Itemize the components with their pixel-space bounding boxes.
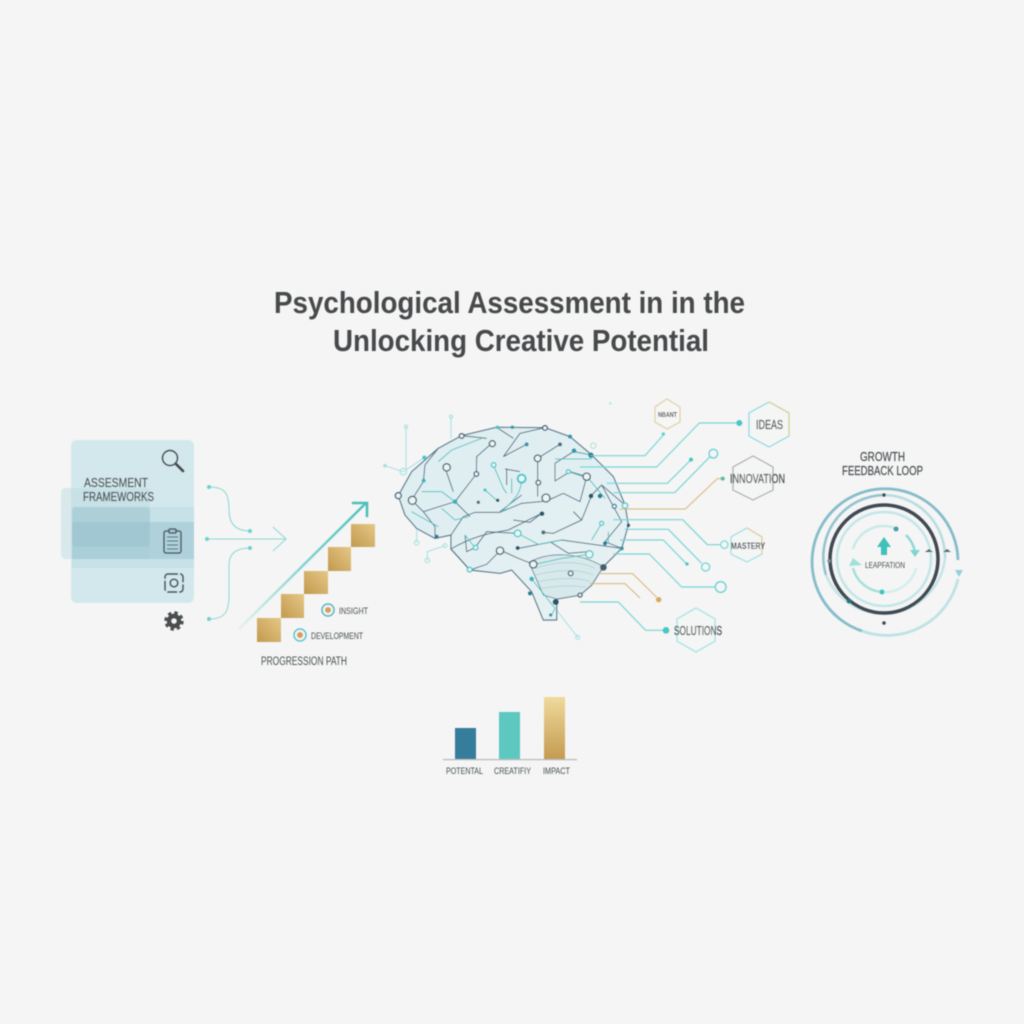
cerebellum (529, 555, 603, 599)
connectors to progression path (205, 485, 286, 621)
teal lines (580, 423, 737, 630)
network nodes: filled (422, 426, 630, 617)
title: Unlocking Creative Potential (333, 323, 709, 358)
bar chart (443, 697, 577, 777)
darker band (72, 522, 194, 559)
marker: insight: INSIGHT (339, 606, 368, 617)
hexagon: mastery: MASTERY (731, 541, 765, 552)
axis label: impact: IMPACT (543, 766, 570, 777)
brain outline (398, 427, 628, 620)
marker: insight (322, 604, 368, 617)
loop heading: GROWTH (860, 449, 905, 464)
inner highlighted card (72, 507, 150, 547)
hexagon: ideas (749, 402, 789, 447)
icon: clipboard (164, 529, 181, 553)
hexagon: innovation: INNOVATION (730, 471, 785, 486)
line end nodes (656, 420, 742, 634)
network nodes: dark open (395, 426, 590, 597)
marker: development: DEVELOPMENT (311, 631, 363, 642)
bar: impact (544, 697, 565, 759)
gold lines (590, 479, 722, 598)
brain network (384, 402, 630, 639)
panel heading line 2: FRAMEWORKS (83, 489, 154, 504)
ring arrowheads and dots (827, 493, 963, 625)
label: progression path: PROGRESSION PATH (261, 656, 347, 668)
hexagon: innovation (730, 456, 785, 500)
overlapping band (72, 507, 194, 568)
title (274, 285, 745, 358)
hexagon: solutions (674, 608, 722, 652)
panel heading: ASSESMENT (84, 475, 148, 490)
stairs (257, 524, 375, 642)
icon: gear (166, 613, 182, 629)
outer floating nodes (384, 402, 612, 639)
back card (71, 440, 194, 603)
growth arrow (240, 503, 367, 628)
folds and sulci (412, 427, 625, 570)
loop heading line 2: FEEDBACK LOOP (842, 463, 923, 478)
network nodes: teal open (467, 463, 628, 572)
icon: magnifier (162, 450, 183, 471)
axis label: potential: POTENTAL (446, 766, 483, 777)
outer ring (812, 489, 958, 635)
bar: potential (455, 728, 476, 759)
icon: up arrow (877, 537, 891, 555)
output hexagon labels (655, 399, 789, 652)
teal pathways (412, 438, 608, 615)
panel: assessment frameworks (61, 440, 194, 629)
progression path staircase (240, 503, 375, 668)
bar: creativity (499, 712, 520, 759)
growth feedback loop (812, 449, 963, 635)
hexagon: mastery (731, 528, 765, 562)
overlapping left card (61, 488, 150, 559)
hexagon: hidden node: NBANT (658, 410, 677, 419)
icon: camera assessment (165, 574, 183, 592)
baseline (443, 759, 577, 760)
hexagon: hidden node (655, 399, 680, 429)
title: Psychological Assessment in in the (274, 285, 745, 320)
loop centre label: LEAPFATION (865, 560, 905, 570)
output connector lines (580, 420, 742, 634)
marker: development (294, 629, 363, 642)
axis label: creativity: CREATIFIY (494, 766, 531, 777)
hexagon: ideas: IDEAS (756, 417, 783, 432)
hexagon: solutions: SOLUTIONS (674, 623, 722, 638)
